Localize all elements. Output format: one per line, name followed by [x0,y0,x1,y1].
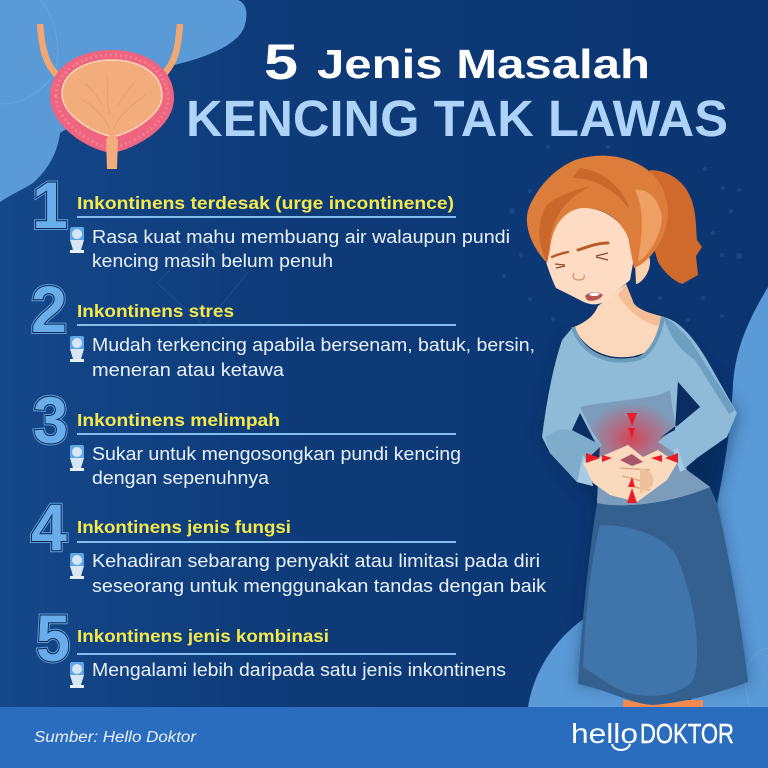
source text: Sumber: Hello Doktor [34,729,197,746]
icon: toilet 1 [70,227,84,253]
nose [573,273,584,280]
number 3: 3 [33,383,68,457]
heading 5: Inkontinens jenis kombinasi [77,626,329,646]
body 4 [92,551,547,596]
right arm shade [663,317,735,414]
heading 1: Inkontinens terdesak (urge incontinence) [77,193,454,213]
shirt torso [562,317,710,505]
ponytail [640,170,702,284]
cuffs [577,448,685,486]
heading 2: Inkontinens stres [77,301,234,321]
number 5: 5 [36,601,70,675]
skirt highlight [583,525,697,696]
bladder inner [62,60,162,137]
neck shadow [618,284,664,326]
number 2: 2 [31,272,67,346]
eyebrows [552,243,608,257]
red arrows [586,413,678,503]
background blob: right [690,287,768,707]
abdominal pain glow [586,402,678,474]
shirt neckline [573,317,663,361]
body 1 [92,227,510,271]
hair shading [539,168,630,263]
title line 2: KENCING TAK LAWAS [186,90,728,147]
item 1 [32,168,510,271]
body 2: Mudah terkencing apabila bersenam, batuk, bersin, [92,335,535,355]
hair highlight [635,190,662,262]
title: Jenis Masalah [317,41,650,87]
background blob: top left [0,0,246,202]
body 4: seseorang untuk menggunakan tandas dengan baik [92,576,547,596]
background blob: bottom [528,600,640,707]
body 5: Mengalami lebih daripada satu jenis inkontinens [92,660,506,680]
body 3: dengan sepenuhnya [92,468,270,488]
ear [635,253,650,284]
number 2: 2 [31,272,67,346]
icon: toilet 2 [70,336,84,362]
ureters [40,24,180,76]
fingers [620,468,653,490]
icon: bladder [40,24,180,169]
logo: hello doktor [571,718,734,750]
bladder ribs [56,55,168,147]
body 3 [92,444,461,488]
bladder veins [80,75,146,130]
body 1: kencing masih belum penuh [92,251,333,271]
body 1: Rasa kuat mahu membuang air walaupun pundi [92,227,510,247]
item 4 [31,490,547,596]
skirt [578,487,748,705]
number 1: 1 [32,168,68,242]
left arm shade [545,430,602,482]
heading 4: Inkontinens jenis fungsi [77,517,291,537]
face [546,208,634,304]
icon: toilet 3 [70,445,84,471]
icon: toilet 5 [70,662,84,688]
body 3: Sukar untuk mengosongkan pundi kencing [92,444,461,464]
finger tone [640,468,654,494]
urethra [106,134,118,169]
illustration: woman [527,156,748,708]
arm gaps [572,382,700,442]
number 5: 5 [36,601,70,675]
body 4: Kehadiran sebarang penyakit atau limitasi pada diri [92,551,540,571]
mouth [585,292,603,301]
neck and chest [574,284,664,357]
body 2: meneran atau ketawa [92,360,285,380]
item 3 [33,383,461,488]
number 4: 4 [31,490,67,564]
item 5 [36,601,506,688]
heading 3: Inkontinens melimpah [77,410,280,430]
number 4: 4 [31,490,67,564]
body 2 [92,335,535,380]
title [186,34,728,147]
logo: hello doktor: DOKTOR [640,718,734,749]
number 1: 1 [32,168,68,242]
bladder wall [50,50,174,152]
hands [583,445,677,502]
body shadow [541,317,748,684]
logo: hello doktor: hello [571,718,638,749]
hand gap [620,454,643,466]
shirt lower shadow [580,390,710,505]
footer bar [0,707,768,768]
legs [623,700,703,708]
number 3: 3 [33,383,68,457]
background stars [502,145,742,322]
item 2 [31,272,535,380]
left arm [542,340,602,486]
right arm [658,317,737,470]
hair front [527,156,668,268]
title line 1: 5 [264,34,298,90]
icon: toilet 4 [70,553,84,579]
eyes closed [555,253,608,268]
